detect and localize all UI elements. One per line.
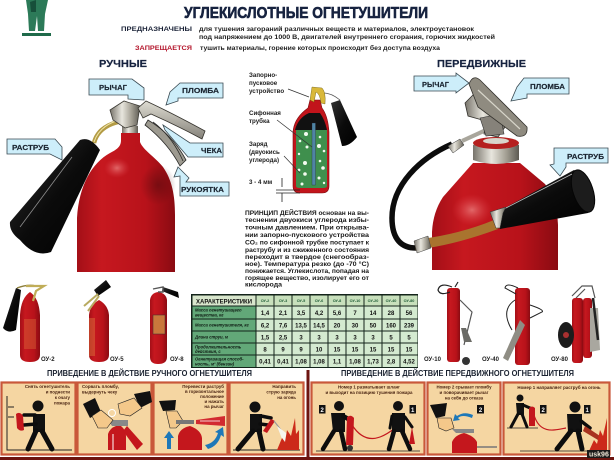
gas space — [295, 113, 327, 130]
label: seal, mobile: ПЛОМБА — [530, 82, 566, 91]
row: extinguisher mass: 13,5 — [295, 324, 307, 330]
label: horn, portable: РАСТРУБ — [12, 143, 50, 152]
cross-section callouts: (двуокись — [249, 149, 280, 156]
label: lever, mobile — [414, 73, 469, 93]
mobile step 3: aim horn at fire: 1 — [586, 408, 590, 414]
large mobile extinguisher — [392, 78, 599, 270]
mobile step 3: aim horn at fire — [504, 382, 610, 454]
row: extinguisher mass: 20 — [334, 324, 341, 330]
small extinguisher: ОУ-5: ОУ-5 — [110, 357, 124, 363]
green charge — [296, 130, 327, 188]
heading: portable operation: ПРИВЕДЕНИЕ В ДЕЙСТВИЕ РУЧНОГО ОГНЕТУШИТЕЛЯ — [47, 369, 252, 378]
flames — [277, 418, 299, 450]
flames — [589, 418, 607, 451]
row: jet length: 5 — [407, 336, 411, 342]
gold hose — [94, 122, 118, 143]
table header: ОУ-10 — [350, 299, 360, 303]
black horn — [492, 170, 594, 229]
row: agent mass: 7 — [353, 311, 357, 317]
table header: ОУ-6 — [315, 299, 323, 303]
cross-section callouts: устройство — [249, 88, 284, 95]
figure 2 — [323, 401, 350, 449]
small figure — [511, 394, 530, 427]
row: duration: Продолжительность — [195, 344, 242, 349]
spray — [277, 426, 290, 444]
small extinguisher: ОУ-80: ОУ-80 — [551, 357, 569, 363]
label: seal, portable: ПЛОМБА — [182, 86, 220, 95]
row: duration: 9 — [299, 348, 303, 354]
row: extinguisher mass: Масса огнетушителя, кг — [195, 322, 249, 328]
silver collar — [473, 139, 519, 164]
small extinguisher: ОУ-40: ОУ-40 — [482, 357, 500, 363]
mobile step 1: unroll hose: Номер 1 разматывает шланг — [338, 384, 400, 390]
cylinder — [432, 163, 558, 270]
row: duration: 10 — [316, 348, 323, 354]
small extinguisher: ОУ-10: ОУ-10 — [424, 357, 442, 363]
small extinguisher: ОУ-40 — [482, 285, 542, 365]
step 2: pull seal — [78, 382, 152, 454]
mobile step 1: unroll hose: 1 — [411, 408, 415, 414]
blue arrow — [453, 413, 473, 421]
principle of operation text: переходит в твердое (снегообраз- — [245, 253, 369, 261]
step 3: aim horn: Перевести раструб — [182, 384, 224, 389]
large figure — [557, 402, 590, 449]
row: agent mass: 4,2 — [315, 311, 324, 317]
row: duration: действия, с — [195, 349, 221, 354]
principle of operation text — [245, 208, 370, 288]
row: capacity: 1,08 — [349, 360, 361, 366]
step 4: direct jet: на огонь — [277, 395, 296, 400]
small extinguisher: ОУ-8: ОУ-8 — [170, 357, 184, 363]
mobile step 2: pull seal: Номер 2 срывает пломбу — [436, 384, 492, 390]
cross-section callouts: Запорно- — [249, 72, 277, 79]
label: horn, mobile: РАСТРУБ — [567, 152, 605, 161]
row: duration: 15 — [388, 348, 395, 354]
mobile step 1: unroll hose: и выходит на позицию тушения пожара — [326, 390, 413, 395]
mobile step 2: pull seal: 2 — [479, 408, 483, 414]
step 3: aim horn: и нажать — [205, 399, 224, 404]
prohibition text block — [135, 44, 440, 52]
mobile step 2: pull seal: и поворачивает рычаг — [440, 390, 489, 395]
siphon tube — [312, 123, 316, 185]
label: seal, portable — [166, 83, 223, 105]
small extinguisher: ОУ-5 — [84, 280, 124, 363]
blue arrows — [164, 427, 224, 449]
cross-section callouts: 3 - 4 мм — [249, 179, 273, 186]
hose — [352, 425, 395, 439]
row: agent mass: 5,6 — [333, 311, 342, 317]
step 1: take extinguisher — [2, 382, 76, 454]
yellow lever — [310, 87, 325, 104]
heading: mobile: ПЕРЕДВИЖНЫЕ — [437, 58, 526, 70]
dark frame lines — [0, 370, 614, 460]
principle of operation text: ПРИНЦИП ДЕЙСТВИЯ основан на вы- — [245, 208, 369, 217]
step 1: take extinguisher: Снять огнетушитель — [25, 384, 70, 389]
lever — [469, 78, 527, 136]
row: capacity: 4,52 — [403, 360, 415, 366]
valve block — [465, 93, 510, 137]
principle of operation text: кислорода — [245, 282, 282, 288]
cross-section diagram — [293, 87, 357, 193]
step 1: take extinguisher: пожара — [54, 400, 71, 406]
hose — [392, 144, 452, 248]
row: jet length: 3 — [353, 336, 357, 342]
principle of operation text: точным давлением. При открыва- — [245, 224, 369, 232]
row: agent mass: вещества, кг — [195, 312, 224, 318]
row: capacity: 0,41 — [259, 360, 271, 366]
large portable extinguisher — [10, 101, 205, 272]
prohibition text block: ЗАПРЕЩАЕТСЯ — [135, 45, 192, 52]
row: extinguisher mass: 6,2 — [261, 324, 270, 330]
row: extinguisher mass: 50 — [370, 324, 377, 330]
logo: green statue — [22, 0, 51, 36]
small extinguisher: ОУ-2: ОУ-2 — [41, 357, 55, 363]
row: capacity — [192, 356, 418, 367]
row: capacity: Огнетушащая способ- — [195, 356, 244, 361]
row: agent mass: 14 — [370, 311, 377, 317]
row: agent mass: 3,5 — [297, 311, 306, 317]
cart extinguisher — [346, 416, 354, 445]
label: lever, mobile: РЫЧАГ — [422, 80, 450, 89]
table header: ОУ-20 — [368, 299, 378, 303]
black horn — [10, 139, 100, 254]
row: extinguisher mass: 7,6 — [279, 324, 288, 330]
step 1: take extinguisher: к очагу — [55, 395, 71, 400]
label: lever, portable: РЫЧАГ — [99, 83, 128, 92]
row: capacity: 0,41 — [277, 360, 289, 366]
purpose text block: для тушения загораний различных веществ и материалов, электроустановок — [199, 25, 475, 33]
row: agent mass: Масса огнетушащего — [195, 308, 242, 312]
principle of operation text: понижается. Углекислота, попадая на — [245, 268, 369, 275]
row: extinguisher mass: 160 — [386, 324, 397, 330]
shell — [293, 100, 329, 193]
mobile step 2: pull seal — [428, 382, 500, 454]
table header: ОУ-3 — [279, 299, 287, 303]
purpose text block: под напряжением до 1000 В, двигателей внутреннего сгорания, горючих жидкостей — [199, 33, 495, 41]
row: extinguisher mass: 30 — [352, 324, 359, 330]
row: jet length: 3 — [299, 336, 303, 342]
row: capacity: 1,1 — [333, 360, 342, 366]
small extinguisher: ОУ-80 — [551, 286, 600, 363]
mobile step 1: unroll hose: 2 — [321, 408, 325, 414]
label: lever, portable — [89, 79, 144, 100]
row: jet length: 3 — [317, 336, 321, 342]
row: capacity: ность, м² (бензин) — [195, 361, 235, 366]
mobile step 3: aim horn at fire: Номер 1 направляет раструб на огонь — [517, 385, 601, 390]
small extinguisher: ОУ-10 — [424, 282, 472, 365]
row: jet length: 1,5 — [261, 336, 270, 342]
row: agent mass: 56 — [406, 311, 413, 317]
label: handle: РУКОЯТКА — [181, 185, 225, 194]
principle of operation text: горящее вещество, изолирует его от — [245, 275, 370, 282]
table header: ОУ-40 — [386, 299, 396, 303]
principle of operation text: теснении двуокиси углерода избы- — [245, 216, 369, 224]
label: pin — [163, 125, 223, 157]
row: jet length: 5 — [389, 336, 393, 342]
row: jet length: 3 — [371, 336, 375, 342]
row: duration: 15 — [406, 348, 413, 354]
mobile step 3: aim horn at fire: 2 — [542, 408, 546, 414]
row: capacity: 1,73 — [367, 360, 379, 366]
label: horn, portable — [7, 139, 62, 160]
label: handle — [174, 167, 229, 196]
handle — [145, 120, 186, 166]
valve head — [122, 126, 138, 133]
row: agent mass: 1,4 — [261, 311, 270, 317]
principle of operation text: ное). Температура резко (до -70 °С) — [245, 260, 369, 268]
table header: ОУ-8 — [333, 299, 341, 303]
heading: mobile operation: ПРИВЕДЕНИЕ В ДЕЙСТВИЕ ПЕРЕДВИЖНОГО ОГНЕТУШИТЕЛЯ — [341, 369, 574, 378]
cross-section callouts — [249, 72, 312, 202]
heading: portable: РУЧНЫЕ — [99, 58, 147, 70]
label: pin: ЧЕКА — [201, 146, 223, 155]
table header: ОУ-5 — [297, 299, 305, 303]
row: agent mass — [192, 306, 418, 318]
step 3: aim horn: положение — [200, 394, 225, 399]
lever — [138, 101, 205, 139]
figure — [238, 402, 271, 449]
cylinder body — [77, 133, 175, 272]
row: extinguisher mass — [192, 320, 418, 330]
step 2: pull seal: выдернуть чеку — [82, 390, 118, 394]
mobile step 2: pull seal: на себя до отказа — [445, 396, 484, 400]
cross-section callouts: пусковое — [249, 80, 278, 87]
label: seal, mobile — [511, 78, 569, 101]
step 3: aim horn: в горизонтальное — [185, 389, 225, 394]
row: agent mass: 2,1 — [279, 311, 288, 317]
principle of operation text: нии запорно-пускового устройства — [245, 231, 369, 239]
figure — [24, 400, 52, 449]
row: duration — [192, 344, 418, 354]
characteristics table — [191, 294, 418, 368]
horn, small — [331, 100, 357, 146]
row: jet length: 2,5 — [279, 336, 288, 342]
row: capacity: 1,08 — [295, 360, 307, 366]
small extinguisher: ОУ-2 — [3, 285, 55, 363]
step 3: aim horn: на рычаг — [204, 404, 224, 409]
table header: ХАРАКТЕРИСТИКИ — [196, 298, 252, 306]
step 2: pull seal: Сорвать пломбу, — [82, 384, 119, 389]
row: agent mass: 28 — [388, 311, 395, 317]
row: jet length: Длина струи, м — [194, 334, 229, 340]
row: duration: 8 — [263, 348, 267, 354]
row: capacity: 2,8 — [387, 360, 396, 366]
step 4: direct jet: струю заряда — [266, 390, 297, 394]
step 3: aim horn — [154, 382, 228, 454]
watermark: usk96 — [589, 452, 609, 458]
cross-section callouts: трубка — [249, 118, 270, 125]
label: horn, mobile — [550, 148, 608, 176]
row: extinguisher mass: 239 — [404, 324, 415, 330]
prohibition text block: тушить материалы, горение которых происходит без доступа воздуха — [200, 44, 440, 52]
purpose text block — [121, 25, 495, 41]
cross-section callouts: Сифонная — [249, 110, 281, 117]
row: extinguisher mass: 14,5 — [313, 324, 325, 330]
row: jet length — [192, 332, 418, 342]
table header: ОУ-80 — [404, 299, 414, 303]
table header: ОУ-2 — [261, 299, 269, 303]
row: duration: 15 — [334, 348, 341, 354]
row: duration: 15 — [370, 348, 377, 354]
title: УГЛЕКИСЛОТНЫЕ ОГНЕТУШИТЕЛИ — [184, 5, 428, 22]
table header — [192, 296, 418, 306]
cross-section callouts: Заряд — [249, 141, 268, 148]
wood handle — [414, 220, 498, 251]
mobile step 1: unroll hose — [312, 382, 424, 454]
step 4: direct jet — [230, 382, 304, 454]
small extinguisher: ОУ-8 — [150, 287, 184, 364]
row: capacity: 1,08 — [313, 360, 325, 366]
principle of operation text: раструбу и из сжиженного состояния — [245, 246, 369, 254]
row: duration: 15 — [352, 348, 359, 354]
row: jet length: 3 — [335, 336, 339, 342]
figure 1 — [389, 401, 412, 449]
step 1: take extinguisher: и поднести — [46, 390, 70, 394]
row: duration: 9 — [281, 348, 285, 354]
principle of operation text: СО₂ по сифонной трубке поступает к — [245, 238, 370, 246]
hose coupling and pipe — [448, 139, 464, 153]
cross-section callouts: углерода) — [249, 157, 279, 164]
purpose text block: ПРЕДНАЗНАЧЕНЫ — [121, 26, 192, 33]
step 4: direct jet: Направить — [272, 384, 296, 389]
